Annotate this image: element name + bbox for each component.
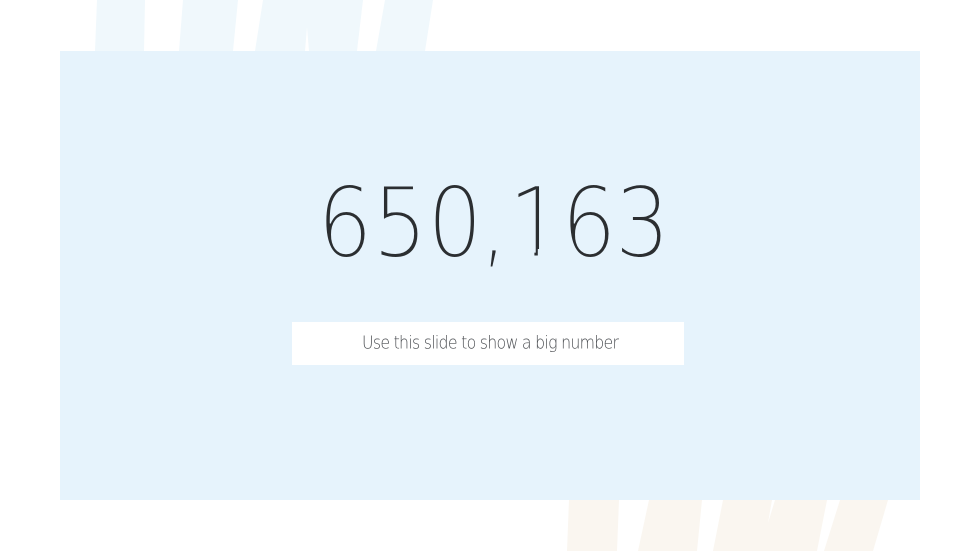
caption box bbox=[292, 322, 684, 365]
main panel bbox=[60, 51, 920, 500]
big number: 650,163 bbox=[317, 167, 670, 279]
caption text: Use this slide to show a big number bbox=[362, 333, 619, 353]
decorative bottom brush strokes bbox=[567, 500, 888, 551]
decorative top brush strokes bbox=[95, 0, 433, 51]
